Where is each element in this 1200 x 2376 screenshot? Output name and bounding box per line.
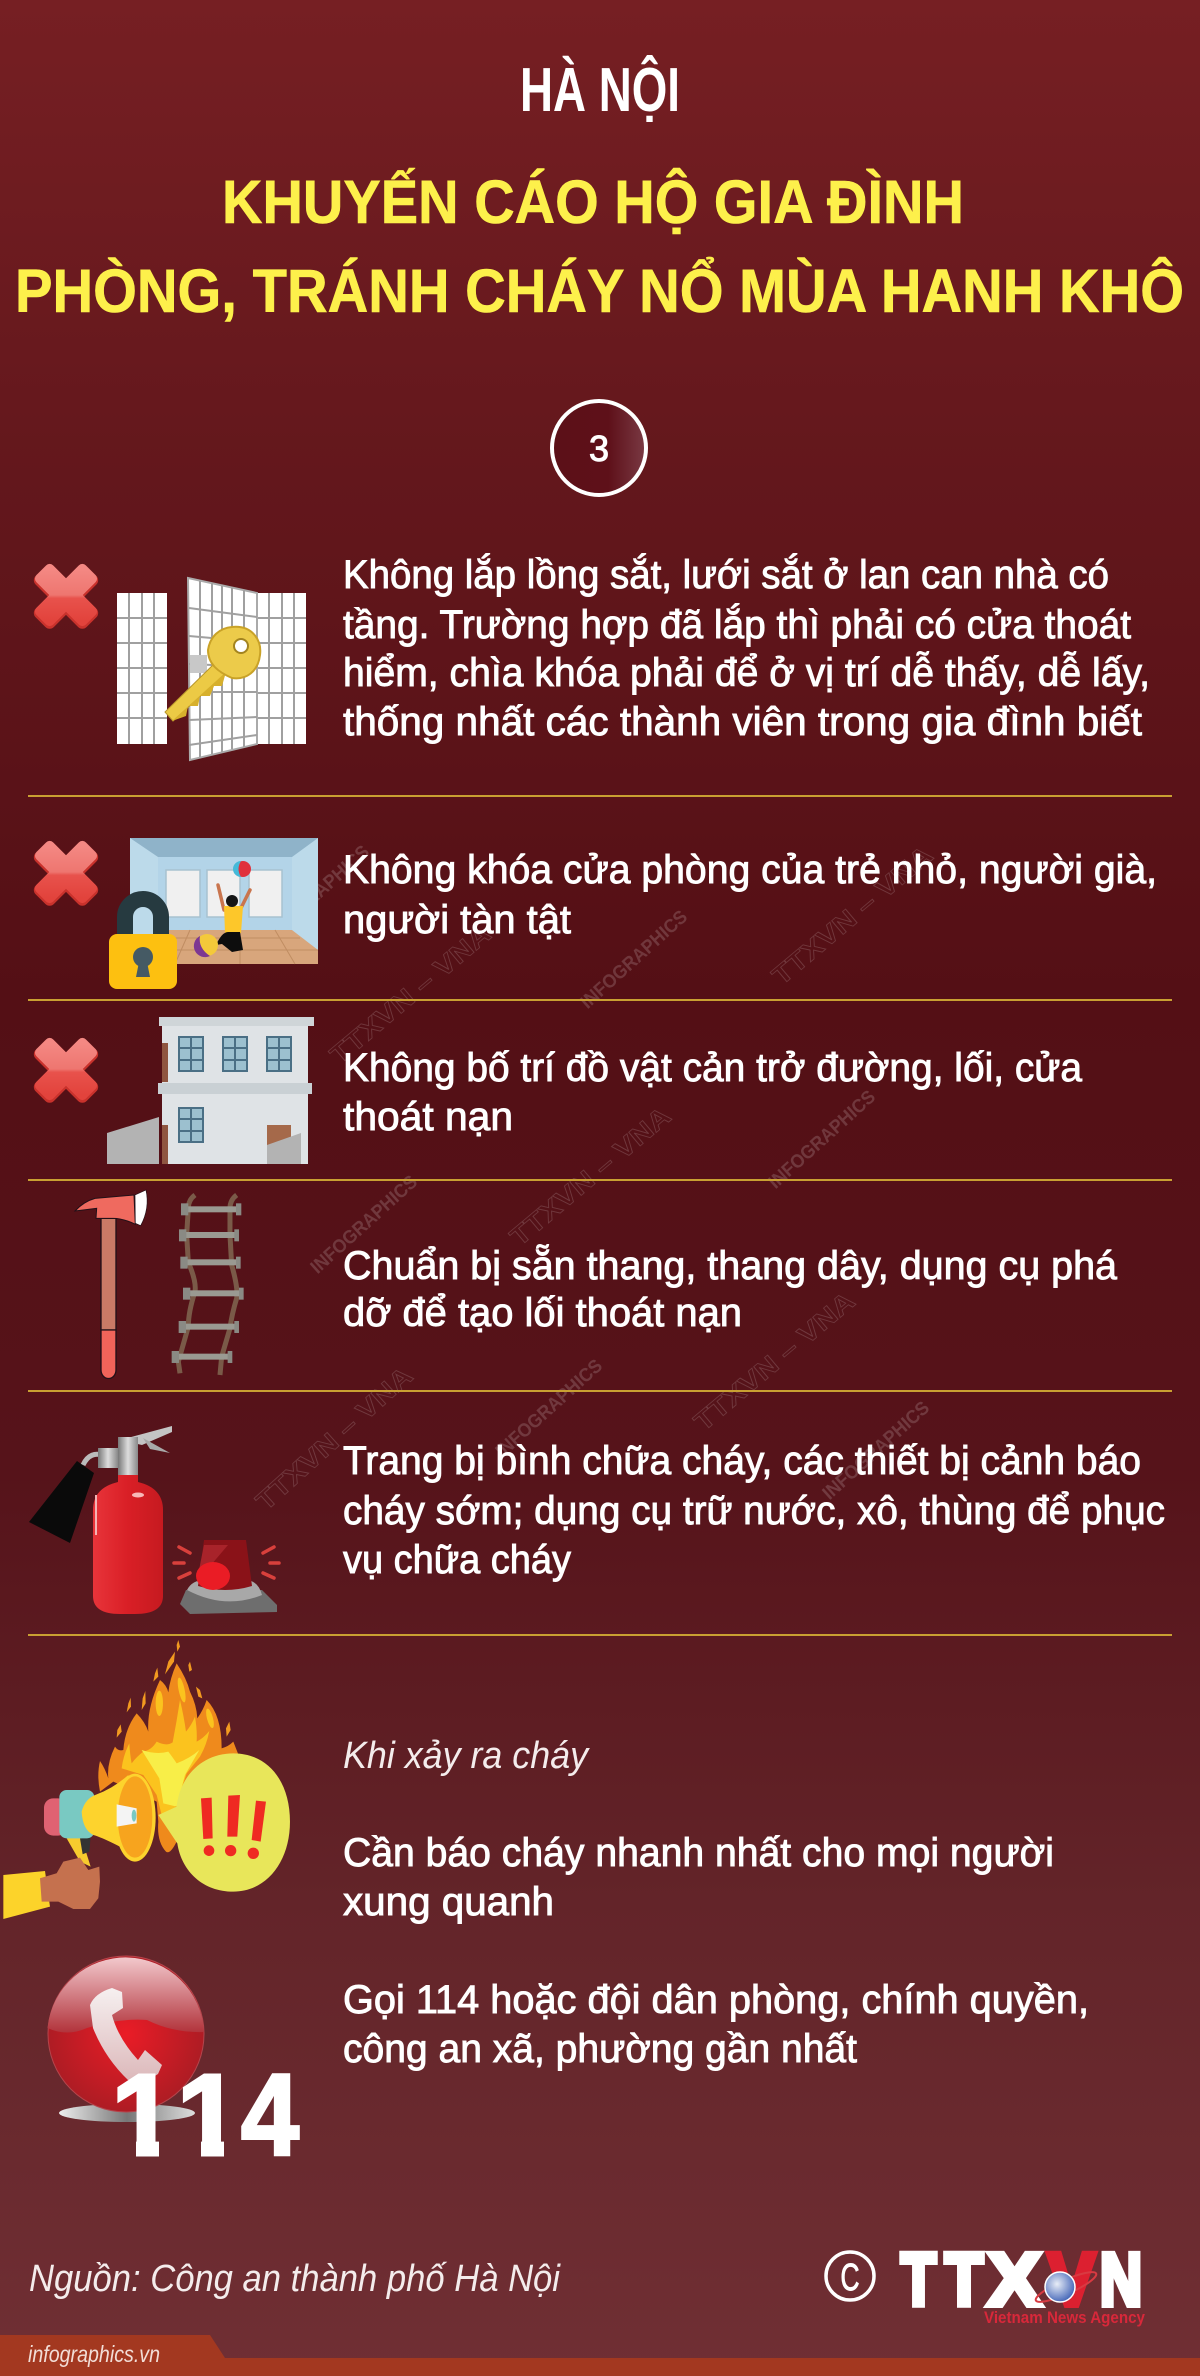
text: when a fire occurs: Khi xảy ra cháy bbox=[343, 1735, 590, 1777]
text: call 114 bbox=[343, 1978, 1089, 2071]
watermarks: INFOGRAPHICS bbox=[819, 1398, 934, 1504]
row 4 text: dỡ để tạo lối thoát nạn bbox=[343, 1291, 742, 1335]
copyright symbol: C bbox=[840, 2257, 860, 2299]
row 1 text: tầng. Trường hợp đã lắp thì phải có cửa thoát bbox=[343, 602, 1131, 647]
cone bbox=[82, 1775, 140, 1858]
handset bbox=[90, 1988, 162, 2081]
number: 11 bbox=[111, 2050, 241, 2180]
logo: TTXVN bbox=[901, 2238, 1145, 2327]
sleeve bbox=[3, 1871, 50, 1919]
page number badge: 3 bbox=[589, 428, 609, 469]
watermarks: TTXVN – VNA bbox=[688, 1285, 861, 1437]
row 5 text: Trang bị bình chữa cháy, các thiết bị cảnh báo bbox=[343, 1439, 1141, 1483]
logo: TTXVN: T bbox=[945, 2238, 983, 2321]
row 5 text bbox=[343, 1439, 1165, 1582]
text: when a fire occurs bbox=[343, 1735, 1054, 1924]
icon: iron gate and key bbox=[117, 578, 306, 760]
text: call 114: công an xã, phường gần nhất bbox=[343, 2027, 857, 2071]
watermarks: TTXVN – VNA bbox=[250, 1360, 419, 1516]
row 1 text: thống nhất các thành viên trong gia đình biết bbox=[343, 700, 1142, 744]
flame bbox=[98, 1663, 238, 1852]
fist bbox=[40, 1858, 100, 1909]
icon: room with child bbox=[130, 838, 318, 964]
watermarks: INFOGRAPHICS bbox=[492, 1356, 607, 1462]
icon: phone button with 114 bbox=[48, 1956, 299, 2180]
row 4 text: Chuẩn bị sẵn thang, thang dây, dụng cụ phá bbox=[343, 1243, 1118, 1288]
row 1 text: Không lắp lồng sắt, lưới sắt ở lan can nhà có bbox=[343, 552, 1109, 597]
icon: cross bbox=[40, 1043, 92, 1097]
watermarks: INFOGRAPHICS bbox=[577, 907, 692, 1013]
ball bbox=[48, 1956, 204, 2112]
icon: cross bbox=[40, 846, 92, 900]
icon: alarm siren bbox=[174, 1540, 279, 1614]
row 2: do not lock rooms bbox=[40, 838, 318, 989]
row 4 text bbox=[343, 1243, 1118, 1335]
exclamation marks bbox=[201, 1795, 266, 1859]
heading: city: HÀ NỘI bbox=[520, 56, 680, 125]
copyright symbol bbox=[826, 2252, 874, 2300]
icon: rope ladder bbox=[172, 1195, 244, 1375]
icon: flame, megaphone and alert bubble bbox=[3, 1640, 290, 1919]
logo: TTXVN: Vietnam News Agency bbox=[984, 2308, 1145, 2327]
watermarks: INFOGRAPHICS bbox=[307, 1172, 422, 1278]
row 1: no iron cages bbox=[40, 569, 306, 760]
logo: TTXVN: N bbox=[1100, 2238, 1142, 2321]
heading: line 1: KHUYẾN CÁO HỘ GIA ĐÌNH bbox=[222, 168, 964, 236]
row 4: tools bbox=[75, 1190, 244, 1379]
watermarks: TTXVN – VNA bbox=[324, 918, 497, 1070]
watermarks bbox=[250, 839, 939, 1516]
watermarks: TTXVN – VNA bbox=[766, 839, 939, 991]
row 5: equipment bbox=[29, 1426, 279, 1614]
row 3 text: Không bố trí đồ vật cản trở đường, lối, cửa bbox=[343, 1046, 1083, 1090]
row 3 text: thoát nạn bbox=[343, 1095, 513, 1139]
row 1 text: hiểm, chìa khóa phải để ở vị trí dễ thấy, dễ lấy, bbox=[343, 650, 1150, 695]
icon: cross bbox=[40, 569, 92, 623]
row 2 text: Không khóa cửa phòng của trẻ nhỏ, người già, bbox=[343, 848, 1157, 892]
icon: padlock bbox=[109, 899, 177, 989]
row 2 text: người tàn tật bbox=[343, 898, 571, 942]
text: when a fire occurs: xung quanh bbox=[343, 1880, 554, 1924]
footer bar: infographics.vn bbox=[28, 2341, 160, 2367]
logo: TTXVN: T bbox=[901, 2238, 936, 2321]
watermarks: TTXVN – VNA bbox=[504, 1100, 677, 1252]
icon: fire axe bbox=[75, 1190, 147, 1379]
icon: building with obstacles bbox=[107, 1017, 314, 1164]
page number badge bbox=[552, 401, 646, 495]
text: when a fire occurs: Cần báo cháy nhanh nhất cho mọi người bbox=[343, 1831, 1054, 1875]
row 5 text: vụ chữa cháy bbox=[343, 1538, 571, 1582]
source note: Nguồn: Công an thành phố Hà Nội bbox=[29, 2258, 561, 2300]
logo: TTXVN: V bbox=[1048, 2238, 1095, 2321]
row 5 text: cháy sớm; dụng cụ trữ nước, xô, thùng để phục bbox=[343, 1489, 1165, 1533]
logo: TTXVN: X bbox=[988, 2238, 1041, 2321]
row 2 text bbox=[343, 848, 1157, 942]
shadow bbox=[59, 2104, 195, 2122]
row 3 text bbox=[343, 1046, 1083, 1139]
row 3: do not block exits bbox=[40, 1017, 314, 1164]
number: 4 bbox=[241, 2050, 299, 2180]
watermarks: INFOGRAPHICS bbox=[259, 842, 374, 948]
row 1 text bbox=[343, 552, 1150, 744]
handle bbox=[67, 1835, 91, 1867]
gloss bbox=[48, 1957, 204, 2032]
text: call 114: Gọi 114 hoặc đội dân phòng, chính quyền, bbox=[343, 1978, 1089, 2022]
title block bbox=[15, 56, 1184, 325]
speech bubble bbox=[158, 1753, 290, 1892]
watermarks: INFOGRAPHICS bbox=[765, 1087, 880, 1193]
number bbox=[117, 2073, 300, 2156]
speaker rear bbox=[44, 1798, 67, 1836]
footer bar bbox=[0, 2335, 1200, 2376]
icon: fire extinguisher bbox=[29, 1426, 172, 1614]
